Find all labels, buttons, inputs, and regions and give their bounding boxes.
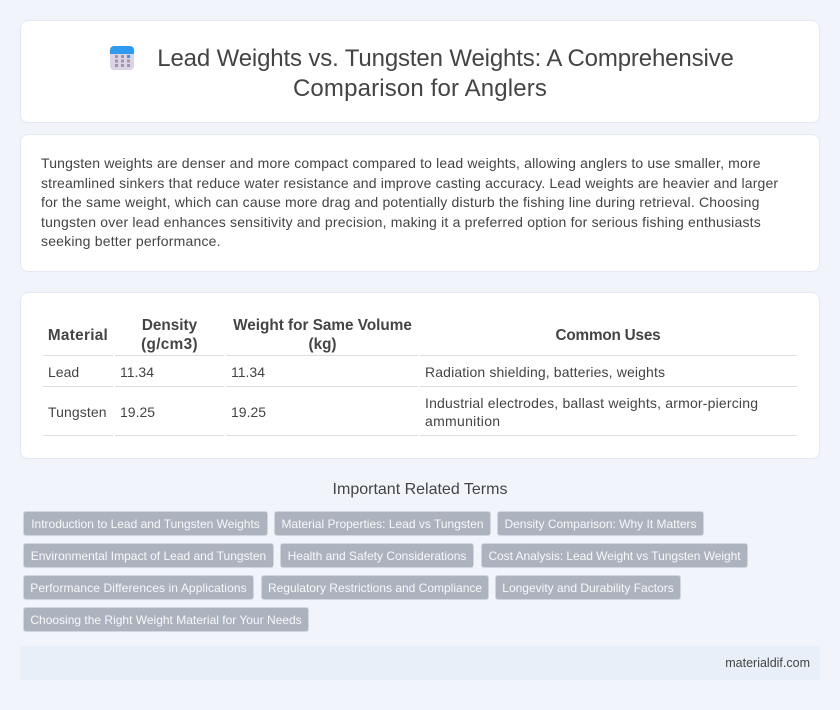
comparison table panel [20, 292, 820, 459]
table header: Weight for Same Volume [233, 317, 412, 334]
row: lead: Lead [48, 364, 79, 380]
row: lead [48, 364, 665, 380]
table header: (g/cm3) [141, 336, 198, 353]
row: lead: Radiation shielding, batteries, weights [425, 364, 665, 380]
title: Comparison for Anglers [293, 75, 547, 102]
summary text: for the same weight, which can cause more drag and potentially disturb the fishing line during retrieval. Choosing [41, 194, 760, 210]
table header: (kg) [308, 336, 337, 353]
related terms tags: Choosing the Right Weight Material for Your Needs [30, 613, 302, 627]
title: Lead Weights vs. Tungsten Weights: A Comprehensive [157, 45, 734, 72]
row: tungsten: ammunition [425, 413, 500, 429]
related terms tags [23, 511, 748, 632]
related terms tags: Performance Differences in Applications [30, 581, 247, 595]
row: tungsten: 19.25 [231, 404, 266, 420]
title [157, 45, 734, 102]
related terms tags: Longevity and Durability Factors [502, 581, 674, 595]
related terms tags: Cost Analysis: Lead Weight vs Tungsten Weight [488, 549, 741, 563]
table header: Common Uses [556, 327, 660, 344]
related terms tags: Regulatory Restrictions and Compliance [268, 581, 482, 595]
summary text: Tungsten weights are denser and more compact compared to lead weights, allowing anglers to use smaller, more [41, 155, 761, 171]
icon: calendar [110, 46, 134, 70]
table header [48, 317, 660, 353]
row: tungsten [48, 395, 758, 429]
related terms heading: Important Related Terms [333, 481, 507, 498]
summary text: tungsten over lead enhances sensitivity and precision, making it a preferred option for serious fishing enthusiasts [41, 214, 761, 230]
row: tungsten: Industrial electrodes, ballast weights, armor-piercing [425, 395, 758, 411]
header panel [20, 20, 820, 123]
row: lead: 11.34 [120, 364, 154, 380]
table header: Material [48, 327, 108, 344]
related terms tags: Introduction to Lead and Tungsten Weights [31, 517, 260, 531]
footer bar [20, 646, 820, 680]
related terms tags: Density Comparison: Why It Matters [504, 517, 697, 531]
row: tungsten: Tungsten [48, 404, 107, 420]
footer source: materialdif.com [725, 656, 810, 670]
summary text: streamlined sinkers that reduce water resistance and improve casting accuracy. Lead weights are heavier and larger [41, 174, 778, 190]
related terms tags: Health and Safety Considerations [288, 549, 466, 563]
summary text: seeking better performance. [41, 233, 221, 249]
related terms tags: Material Properties: Lead vs Tungsten [281, 517, 484, 531]
summary text [41, 155, 778, 249]
table header: Density [142, 317, 197, 334]
summary panel [20, 134, 820, 272]
related terms tags: Environmental Impact of Lead and Tungsten [31, 549, 266, 563]
row: tungsten: 19.25 [120, 404, 155, 420]
row: lead: 11.34 [231, 364, 265, 380]
